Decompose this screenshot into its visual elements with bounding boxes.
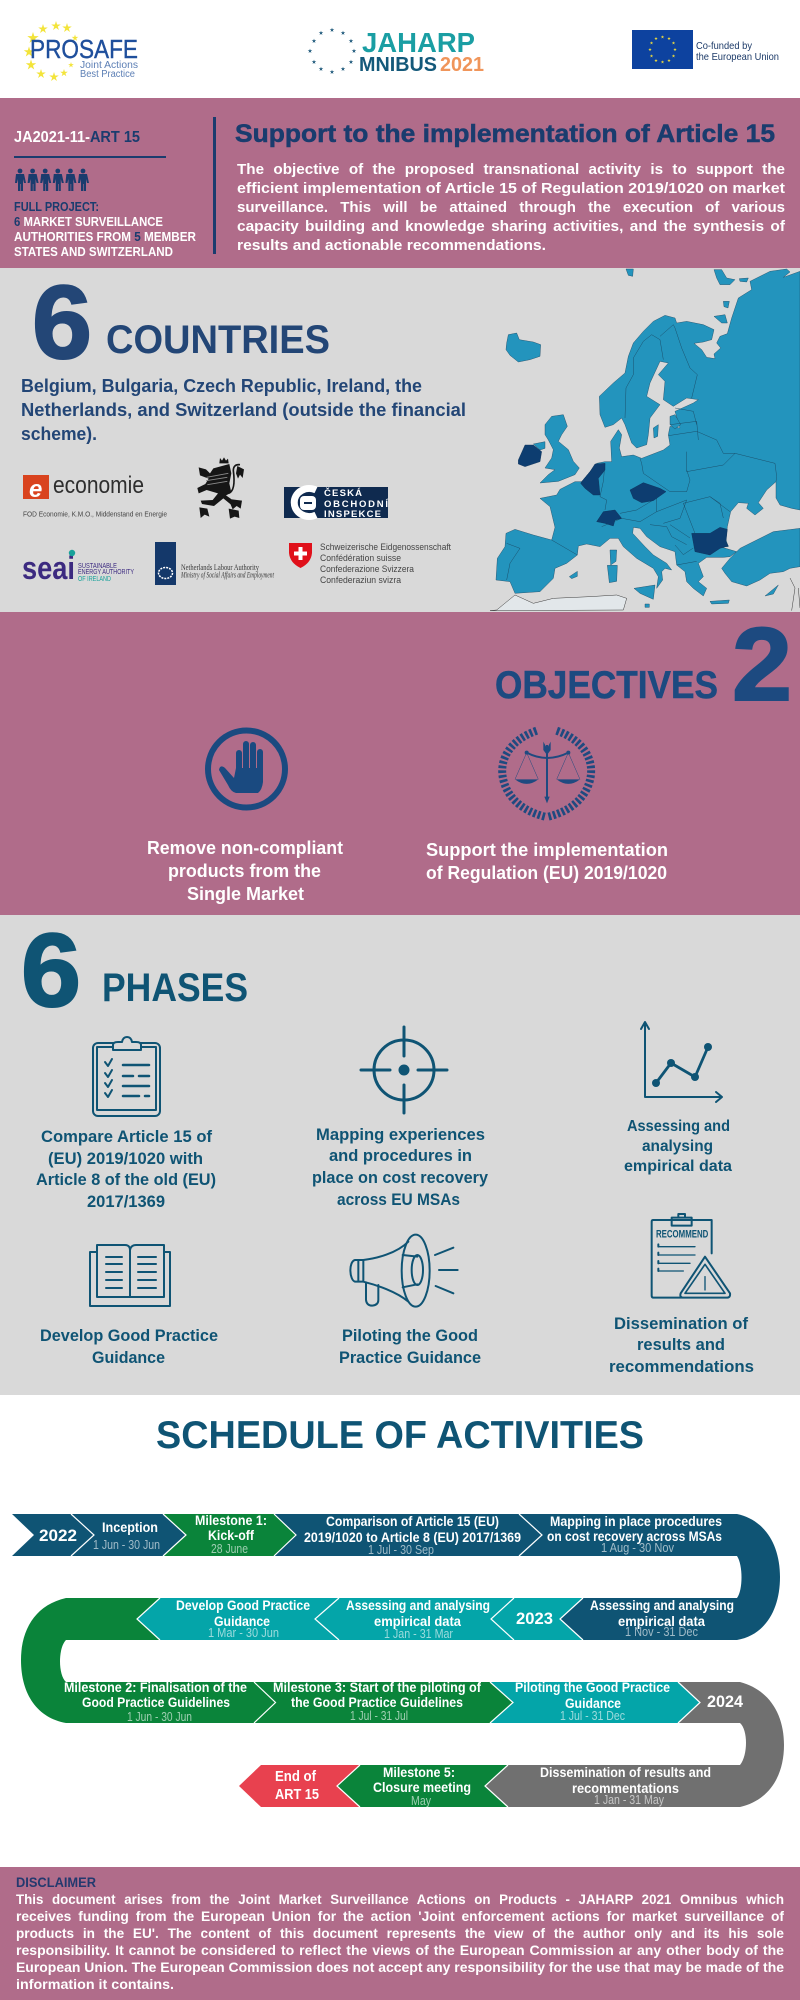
logo: co-funded by the EU: Co-funded by	[696, 40, 753, 52]
objective 2 text: Support the implementation	[426, 840, 668, 860]
labels: row 2: Develop Good Practice	[176, 1598, 310, 1613]
objective paragraph: results and actionable recommendations.	[237, 237, 546, 254]
logo: JAHARP Omnibus 2021: JAHARP	[362, 27, 475, 58]
labels: row 2: 2023	[516, 1609, 553, 1628]
labels: row 2: Guidance	[214, 1614, 270, 1629]
big number 6: 6	[21, 913, 81, 1029]
objective paragraph: The objective of the proposed transnational activity is to support the	[237, 161, 785, 178]
labels: row 3: 1 Jul - 31 Jul	[350, 1709, 408, 1723]
panel: objectives	[0, 607, 800, 915]
labels: row 4: May	[411, 1794, 432, 1808]
labels: row 4: Milestone 5:	[383, 1765, 455, 1780]
objective paragraph	[237, 161, 786, 254]
phase text: assessing	[624, 1118, 732, 1175]
big number 6: 6	[32, 265, 92, 381]
phase text: compare: Article 8 of the old (EU)	[36, 1171, 216, 1189]
objective 1 text: Single Market	[187, 884, 304, 904]
phase text: dissemination	[609, 1315, 754, 1376]
country list	[21, 376, 466, 444]
project scope text: 6 MARKET SURVEILLANCE	[14, 215, 163, 229]
stage: 2022	[12, 1514, 94, 1556]
objective 1 text: products from the	[168, 861, 321, 881]
labels: row 2: empirical data	[374, 1614, 461, 1629]
logo: SEAI: ENERGY AUTHORITY	[78, 569, 134, 576]
labels: row 3: Guidance	[565, 1696, 621, 1711]
heading: countries: COUNTRIES	[106, 318, 330, 362]
country list: Netherlands, and Switzerland (outside the financial	[21, 400, 466, 420]
heading: schedule: SCHEDULE OF ACTIVITIES	[156, 1414, 644, 1457]
labels: row 3: Milestone 2: Finalisation of the	[64, 1680, 247, 1695]
disclaimer text	[16, 1892, 785, 1992]
disclaimer text: European Union. The European Commission does not accept any responsibility for the use that may be made of the	[16, 1960, 784, 1975]
logo: Swiss Confederation: Schweizerische Eidgenossenschaft	[320, 542, 451, 553]
objective 2 text: of Regulation (EU) 2019/1020	[426, 863, 667, 883]
disclaimer text: This document arises from the Joint Market Surveillance Actions on Products - JAHARP 2021 Omnibus which	[16, 1892, 784, 1907]
labels: row 3: Milestone 3: Start of the piloting of	[273, 1680, 481, 1695]
stage: develop	[137, 1598, 339, 1640]
panel: phases	[0, 913, 800, 1395]
logo: Netherlands Labour Authority	[155, 542, 275, 585]
logo: FOD Economie: e	[29, 476, 42, 503]
logo: Swiss Confederation: Confederaziun svizra	[320, 575, 402, 586]
logo: PROSAFE: PROSAFE	[30, 34, 138, 64]
labels: row 3: 1 Jul - 31 Dec	[560, 1709, 625, 1723]
objective paragraph: efficient implementation of Article 15 of Regulation 2019/1020 on market	[237, 180, 785, 197]
logo: PROSAFE: Best Practice	[80, 69, 135, 80]
big number 2: 2	[732, 607, 792, 723]
logo: JAHARP Omnibus 2021: MNIBUS	[359, 54, 437, 76]
icon: target	[361, 1027, 447, 1113]
stage: milestone 3	[254, 1682, 513, 1723]
phase text: mapping: place on cost recovery	[312, 1169, 489, 1187]
logo: Netherlands Labour Authority: Ministry of Social Affairs and Employment	[180, 570, 275, 580]
map: islands	[569, 269, 778, 622]
logo: co-funded by the EU	[632, 30, 779, 69]
disclaimer text: receives funding from the European Union for the action 'Joint enforcement actions for market surveillance of	[16, 1909, 785, 1924]
project scope text: STATES AND SWITZERLAND	[14, 245, 173, 259]
labels: row 1	[39, 1513, 722, 1557]
objective paragraph: surveillance. This will be attained through the execution of various	[237, 199, 785, 216]
labels: row 1: Mapping in place procedures	[550, 1514, 722, 1529]
labels: row 1: 2022	[39, 1526, 77, 1545]
logo: FOD Economie: economie	[53, 472, 144, 499]
logo: FOD Economie	[23, 472, 167, 518]
project scope text: FULL PROJECT:	[14, 200, 99, 214]
disclaimer heading: DISCLAIMER	[16, 1875, 96, 1890]
logo: SEAI	[22, 550, 134, 586]
logo: Czech Trade Inspection	[284, 487, 388, 520]
stage: mapping bend and assessing 2022	[519, 1514, 780, 1640]
objective 1 text: Remove non-compliant	[147, 838, 343, 858]
stage: assessing 2023	[315, 1598, 514, 1640]
labels: row 3: the Good Practice Guidelines	[291, 1695, 463, 1710]
phase text: assessing: empirical data	[624, 1158, 732, 1175]
icon: six people	[15, 169, 89, 191]
labels: row 2: empirical data	[618, 1614, 705, 1629]
labels: row 3: Piloting the Good Practice	[515, 1680, 670, 1695]
phase text: develop	[40, 1327, 218, 1367]
logo: SEAI: SUSTAINABLE	[78, 563, 117, 570]
project scope text	[14, 200, 196, 259]
map: mainland	[496, 269, 800, 596]
phase text: assessing: Assessing and	[627, 1118, 730, 1135]
icon: recommendation clipboard	[652, 1214, 730, 1298]
logo: Czech Trade Inspection: ČESKÁ	[324, 487, 362, 499]
labels: row 1: Comparison of Article 15 (EU)	[326, 1514, 499, 1529]
phase text: dissemination: results and	[637, 1336, 725, 1354]
country list: scheme).	[21, 424, 97, 444]
labels: row 3: 1 Jun - 30 Jun	[127, 1710, 192, 1724]
icon: recommendation clipboard: RECOMMEND	[656, 1229, 708, 1241]
heading: Support to the implementation of Article 15	[235, 120, 775, 148]
labels: row 3: 2024	[707, 1692, 744, 1711]
phase text: dissemination: Dissemination of	[614, 1315, 749, 1333]
logo: Swiss Confederation: Confédération suisse	[320, 553, 401, 564]
map: highlighted countries	[518, 445, 728, 555]
labels: row 4: recommentations	[572, 1781, 679, 1796]
logo: SEAI: OF IRELAND	[78, 576, 111, 583]
phase text: compare: Compare Article 15 of	[41, 1128, 212, 1146]
labels: row 4: End of	[275, 1768, 317, 1785]
logo: Swiss Confederation	[289, 542, 451, 586]
phase text: mapping: and procedures in	[329, 1147, 472, 1165]
labels: row 4	[275, 1765, 711, 1808]
project scope text: AUTHORITIES FROM 5 MEMBER	[14, 230, 196, 244]
heading: objectives: OBJECTIVES	[495, 664, 718, 707]
phase text: mapping: Mapping experiences	[316, 1126, 485, 1144]
phase text: piloting: Piloting the Good	[342, 1327, 478, 1345]
logo: PROSAFE	[24, 21, 138, 81]
logo: FOD Economie: FOD Economie, K.M.O., Middenstand en Energie	[23, 510, 167, 518]
icon: scales of justice	[502, 731, 591, 817]
logo: SEAI: seai	[22, 550, 75, 586]
stage: end of ART 15	[239, 1765, 360, 1807]
phase text: develop: Develop Good Practice	[40, 1327, 218, 1345]
labels: row 2: 1 Jan - 31 Mar	[384, 1627, 453, 1641]
stage: milestone 1	[163, 1514, 296, 1556]
logo: Czech Trade Inspection: INSPEKCE	[324, 509, 381, 520]
logo: Bulgarian lion	[197, 457, 244, 519]
icon: stop hand	[208, 730, 285, 808]
labels: row 1: 2019/1020 to Article 8 (EU) 2017/1369	[304, 1530, 521, 1545]
icon: line chart	[641, 1022, 722, 1102]
labels: row 1: 1 Jun - 30 Jun	[93, 1538, 160, 1552]
labels: row 2: 1 Nov - 31 Dec	[625, 1625, 698, 1639]
labels: row 3: Good Practice Guidelines	[82, 1695, 230, 1710]
logo: JAHARP Omnibus 2021	[308, 27, 484, 76]
logo: PROSAFE: Joint Actions	[80, 60, 138, 71]
stage: 2024 and dissemination ribbon	[485, 1682, 784, 1807]
timeline ribbon	[12, 1513, 784, 1808]
country list: Belgium, Bulgaria, Czech Republic, Ireland, the	[21, 376, 422, 396]
stage: green bend and milestone 2	[21, 1598, 276, 1723]
labels: row 3	[64, 1680, 744, 1724]
phase text: mapping: across EU MSAs	[337, 1191, 460, 1209]
labels: row 4: 1 Jan - 31 May	[594, 1793, 665, 1807]
header band	[0, 0, 800, 98]
phase text: mapping	[312, 1126, 489, 1209]
labels: row 2: Assessing and analysing	[346, 1598, 490, 1613]
phase text: compare: (EU) 2019/1020 with	[48, 1150, 203, 1168]
phase text: piloting: Practice Guidance	[339, 1349, 481, 1367]
labels: row 1: on cost recovery across MSAs	[547, 1529, 722, 1544]
phase text: piloting	[339, 1327, 481, 1367]
icon: clipboard checklist	[93, 1037, 160, 1116]
logo: JAHARP Omnibus 2021: 2021	[440, 54, 484, 76]
logo: Czech Trade Inspection: OBCHODNÍ	[324, 499, 388, 510]
phase text: develop: Guidance	[92, 1349, 165, 1367]
map: Great Britain	[540, 415, 579, 483]
stage: milestone 5	[337, 1765, 508, 1807]
phase text: dissemination: recommendations	[609, 1358, 754, 1376]
project id: JA2021-11-ART 15	[14, 129, 140, 146]
disclaimer text: products in the EU'. The content of this document represents the view of the author only and its his sole	[16, 1926, 784, 1941]
stage: piloting	[490, 1682, 700, 1723]
panel: schedule	[0, 1395, 800, 1867]
objective paragraph: capacity building and knowledge sharing activities, and the synthesis of	[237, 218, 786, 235]
heading: phases: PHASES	[102, 966, 248, 1010]
labels: row 4: Closure meeting	[373, 1780, 471, 1795]
objective 2 text	[426, 840, 668, 883]
labels: row 1: 1 Jul - 30 Sep	[368, 1543, 434, 1557]
labels: row 1: Milestone 1:	[195, 1513, 267, 1528]
labels: row 1: Inception	[102, 1520, 158, 1535]
map: Turkey	[722, 528, 800, 586]
map of Europe	[490, 269, 800, 622]
map: Iceland	[506, 333, 541, 362]
labels: row 1: 1 Aug - 30 Nov	[601, 1541, 675, 1555]
stage: comparison	[274, 1514, 542, 1556]
panel: project summary	[0, 98, 800, 268]
stage: 2023	[491, 1598, 583, 1640]
labels: row 4: Dissemination of results and	[540, 1765, 711, 1780]
labels: row 4: ART 15	[275, 1786, 319, 1803]
labels: row 1: 28 June	[211, 1542, 248, 1556]
labels: row 1: Kick-off	[208, 1528, 254, 1543]
panel: countries	[0, 265, 800, 622]
labels: row 2: 1 Mar - 30 Jun	[208, 1626, 279, 1640]
icon: megaphone	[350, 1235, 458, 1307]
disclaimer text: information it contains.	[16, 1977, 174, 1992]
logo: Swiss Confederation: Confederazione Svizzera	[320, 564, 415, 575]
labels: row 2: Assessing and analysing	[590, 1598, 734, 1613]
stage: inception	[71, 1514, 186, 1556]
panel: disclaimer	[0, 1867, 800, 2000]
map: borders	[507, 325, 777, 580]
phase text: assessing: analysing	[642, 1138, 713, 1155]
icon: open book	[90, 1245, 170, 1306]
phase text: compare	[36, 1128, 216, 1211]
phase text: compare: 2017/1369	[87, 1193, 165, 1211]
labels: row 2	[176, 1598, 734, 1641]
logo: Netherlands Labour Authority: Netherlands Labour Authority	[181, 563, 259, 572]
disclaimer text: responsibility. It cannot be considered to reflect the views of the European Commission ar any other body of the	[16, 1943, 785, 1958]
logo: co-funded by the EU: the European Union	[696, 51, 779, 63]
objective 1 text	[147, 838, 343, 904]
